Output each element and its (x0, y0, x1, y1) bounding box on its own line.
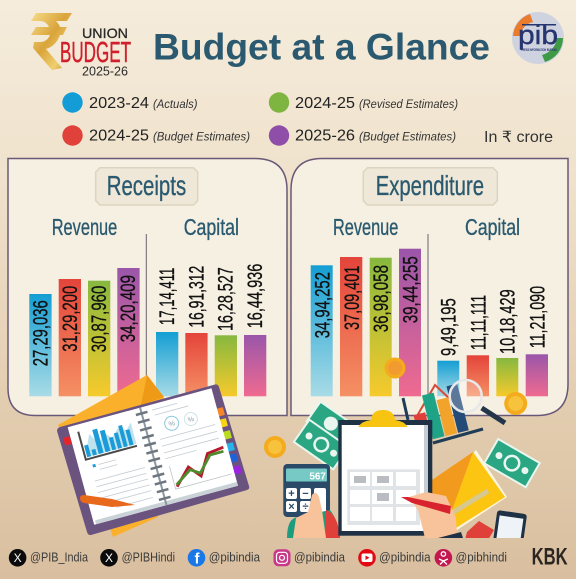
icon: X (100, 549, 118, 567)
title: Budget at a Glance (153, 26, 490, 68)
display value: 567 (309, 472, 326, 482)
magnifier (450, 380, 505, 423)
illustration: calculator (283, 464, 330, 517)
pages (68, 388, 238, 525)
divider (427, 234, 429, 396)
page bullets (92, 464, 96, 468)
note (483, 438, 541, 489)
handle: @PIB_India (30, 550, 88, 564)
panel background (8, 158, 287, 416)
label strip (452, 491, 488, 513)
red ticket (466, 521, 494, 538)
bar chart: receipts revenue (29, 268, 140, 396)
bar chart: expenditure revenue: 34,94,252 (312, 272, 335, 338)
pencil (403, 398, 408, 420)
bar chart: expenditure revenue: 39,44,255 (399, 256, 422, 323)
right hand (409, 492, 457, 538)
logo: Union Budget 2025-26 (31, 13, 131, 78)
logo year: 2025-26 (82, 64, 128, 78)
coin (264, 436, 286, 458)
line chart (168, 447, 232, 489)
icon: facebook: f (194, 550, 200, 568)
logo: PIB (512, 12, 564, 64)
keys (286, 488, 326, 513)
footer social bar (9, 544, 568, 570)
bar chart: expenditure revenue: 37,09,401 (341, 266, 364, 330)
legend: 2025-26 text: 2025-26 (295, 128, 355, 144)
divider (145, 234, 147, 396)
red sleeve (325, 510, 340, 538)
logo letters: pib (518, 20, 558, 50)
icon: pibhindi (435, 549, 452, 567)
icon: facebook (188, 549, 205, 568)
clip (358, 410, 408, 427)
tabs (63, 407, 242, 475)
percent dials (163, 410, 199, 432)
keys: + (288, 488, 295, 500)
legend (62, 92, 458, 146)
logo word: union: UNION (82, 25, 128, 41)
subheading: capital: Capital (184, 214, 239, 240)
logo bar (522, 24, 556, 26)
keys: × (288, 501, 295, 513)
bar chart: expenditure revenue (311, 249, 422, 396)
phone (494, 510, 527, 538)
bar chart: expenditure capital: 11,11,111 (467, 295, 490, 350)
heading: receipts (96, 168, 198, 205)
form table (347, 469, 420, 525)
illustration: banknotes (292, 400, 541, 489)
note (292, 418, 350, 471)
sheet (342, 425, 428, 531)
handle: @pibhindi (456, 550, 507, 564)
pen (80, 495, 135, 507)
subheading: capital: Capital (465, 214, 520, 240)
legend: actuals note: (Actuals) (153, 99, 198, 111)
legend: 2024-25 BE swatch (62, 125, 83, 146)
yellow folder behind notebook (58, 375, 164, 537)
legend: 2023-24 text: 2023-24 (89, 95, 149, 112)
bar chart: receipts revenue: 27,29,036 (30, 300, 52, 366)
panel background (291, 158, 568, 416)
legend: budget estimates note: (Budget Estimates) (153, 132, 250, 144)
red pen (401, 497, 451, 514)
icon: X (9, 549, 26, 567)
logo orange arc (513, 14, 533, 36)
icon: gold rupee (31, 13, 72, 70)
left sleeve (287, 510, 340, 538)
phone screen (496, 515, 524, 538)
clipboard board (338, 420, 432, 536)
legend: revised estimates note: (Revised Estimates) (359, 99, 458, 111)
bar chart: receipts capital: 16,44,936 (244, 264, 267, 328)
envelope flap (430, 452, 473, 510)
heading: expenditure (363, 168, 497, 205)
keys: − (302, 488, 309, 500)
legend: 2024-25 BE text: 2024-25 (89, 128, 149, 144)
legend: 2023-24 swatch (62, 92, 83, 113)
illustration: bar chart and magnifier (403, 380, 505, 443)
panel: receipts (8, 158, 287, 416)
handle: @pibindia (209, 550, 260, 564)
illustration: yellow envelope (430, 450, 507, 530)
illustration: clipboard with hands (287, 410, 463, 538)
unit note: In ₹ crore (484, 129, 553, 146)
subheading: revenue: Revenue (52, 214, 117, 240)
bar chart: expenditure revenue: 36,98,058 (370, 265, 393, 332)
body (283, 464, 330, 517)
handle: @PIBHindi (122, 550, 175, 564)
chart bars (414, 384, 469, 440)
handle: @pibindia (379, 550, 431, 564)
base line (433, 429, 483, 443)
envelope face (432, 452, 505, 528)
legend: budget estimates note: (Budget Estimates) (359, 132, 456, 144)
icon: X: X (14, 551, 22, 565)
percent dials: % (168, 420, 176, 429)
illustration: coins (264, 358, 527, 458)
coin (504, 392, 527, 415)
screen (286, 468, 327, 482)
note (305, 400, 356, 447)
illustration: ticket and phone (466, 510, 527, 538)
bar chart: expenditure capital: 10,18,429 (497, 289, 520, 354)
panel: expenditure (291, 158, 568, 416)
icon: instagram (274, 549, 290, 566)
folder shade (141, 375, 164, 405)
logo green arc (542, 38, 563, 62)
heading: expenditure: Expenditure (376, 170, 484, 201)
bar chart: expenditure capital (437, 286, 550, 396)
sheet edge (424, 425, 428, 492)
bar chart: receipts capital: 16,28,527 (215, 267, 238, 331)
percent dials: % (187, 416, 195, 424)
bar chart: receipts capital: 17,14,411 (156, 268, 179, 325)
envelope paper (456, 450, 507, 530)
legend: 2024-25 RE text: 2024-25 (295, 95, 355, 112)
heading: receipts: Receipts (107, 170, 186, 201)
bar chart: receipts capital (156, 264, 267, 396)
spiral binding (134, 406, 172, 507)
coin (384, 358, 406, 378)
page bar chart (78, 418, 137, 460)
legend: 2024-25 RE swatch (269, 92, 289, 113)
bar chart: receipts revenue: 31,29,200 (59, 286, 82, 352)
bar chart: expenditure capital: 11,21,090 (527, 286, 550, 348)
logo word: budget: BUDGET (60, 37, 131, 69)
notebook cover (57, 384, 249, 535)
arrow line (417, 385, 453, 416)
subheading: revenue: Revenue (333, 214, 398, 240)
right page lines (152, 395, 220, 459)
handle: @pibindia (294, 550, 345, 564)
bar chart: expenditure capital: 9,49,195 (438, 298, 461, 356)
page text lines (91, 453, 153, 511)
bar chart: receipts revenue: 30,87,960 (88, 286, 111, 352)
bar chart: receipts revenue: 34,20,409 (117, 275, 140, 342)
logo disc (512, 12, 564, 64)
left hand (293, 493, 326, 538)
icon: youtube (358, 549, 376, 567)
icon: X: X (105, 551, 113, 565)
illustration: notebook with charts (57, 375, 249, 537)
cuff (438, 532, 463, 538)
legend: 2025-26 swatch (269, 125, 289, 146)
bar chart: receipts capital: 16,91,312 (185, 266, 208, 328)
keys: ÷ (302, 501, 309, 513)
